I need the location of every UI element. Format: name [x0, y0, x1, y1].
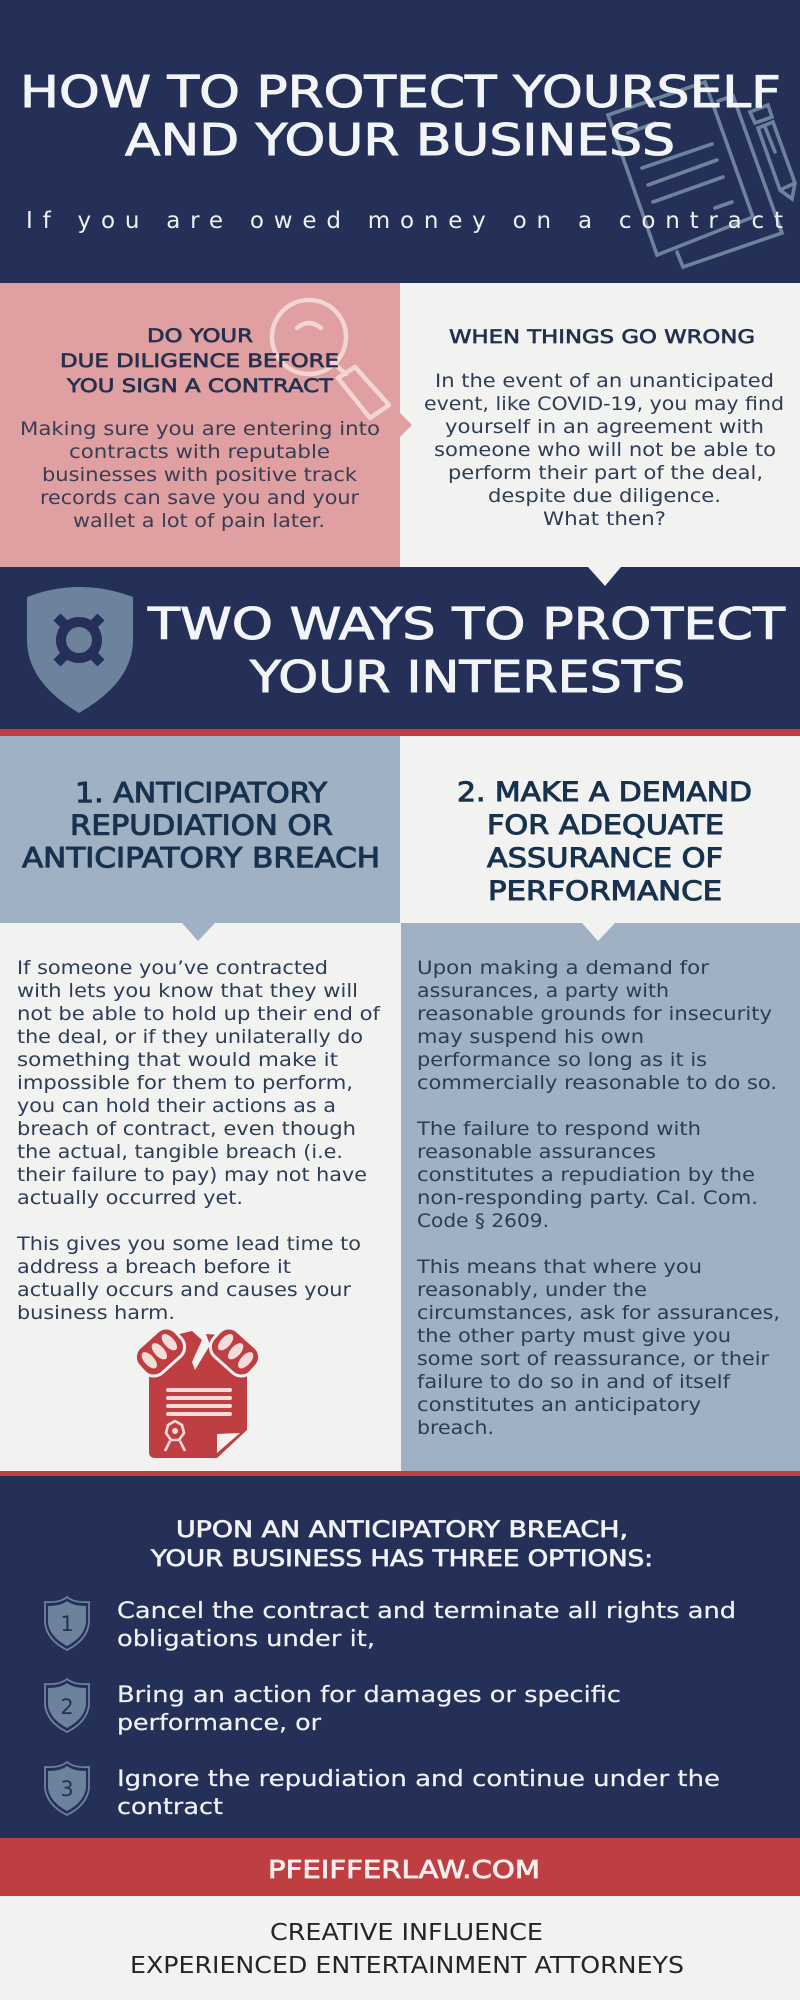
text: demand paragraph three: some sort of reassurance, or their	[417, 1348, 769, 1370]
text: anticipatory paragraph one: not be able to hold up their end of	[17, 1003, 381, 1025]
text: due diligence body: Making sure you are entering into	[20, 418, 380, 440]
heading: do your due diligence: DUE DILIGENCE BEFORE	[60, 350, 339, 372]
text: when things go wrong body: What then?	[543, 508, 666, 530]
panel: demand for adequate assurance	[400, 736, 800, 1471]
website banner	[0, 1838, 800, 1896]
text: due diligence body: records can save you and your	[40, 487, 359, 509]
arrow: off-white pointer	[582, 923, 615, 941]
title	[20, 67, 781, 166]
text: when things go wrong body: yourself in an agreement with	[445, 416, 764, 438]
text: anticipatory paragraph two: actually occurs and causes your	[17, 1279, 351, 1301]
text: anticipatory paragraph two: address a breach before it	[17, 1256, 291, 1278]
text: anticipatory paragraph one: If someone you’ve contracted	[17, 957, 328, 979]
text: demand paragraph three: breach.	[417, 1417, 494, 1439]
text: anticipatory paragraph two: This gives you some lead time to	[16, 1233, 361, 1255]
icon: torn contract with fists	[130, 1323, 265, 1458]
icon: shield number 2	[45, 1679, 89, 1732]
title: HOW TO PROTECT YOURSELF	[20, 67, 781, 118]
text: due diligence body: wallet a lot of pain later.	[73, 510, 325, 532]
text: anticipatory paragraph one	[17, 957, 381, 1209]
icon: magnifying glass	[272, 300, 389, 418]
text: due diligence body	[20, 418, 380, 532]
text: option 2: Bring an action for damages or specific	[117, 1683, 621, 1708]
heading: make a demand: 2. MAKE A DEMAND	[457, 777, 752, 808]
heading: anticipatory repudiation: ANTICIPATORY BREACH	[22, 842, 380, 874]
text: anticipatory paragraph one: actually occurred yet.	[17, 1187, 243, 1209]
heading: three options	[150, 1518, 653, 1572]
arrow: slate pointer	[182, 923, 215, 941]
heading: anticipatory repudiation: REPUDIATION OR	[70, 810, 333, 842]
title: AND YOUR BUSINESS	[125, 115, 675, 166]
text: due diligence body: businesses with positive track	[42, 464, 357, 486]
icon: contract and pencil	[608, 82, 795, 267]
footer tagline: CREATIVE INFLUENCE	[270, 1920, 543, 1946]
text: when things go wrong body: event, like COVID-19, you may find	[424, 393, 784, 415]
icon: shield number 3	[45, 1762, 89, 1815]
text: anticipatory paragraph one: impossible for them to perform,	[17, 1072, 353, 1094]
text: demand paragraph two: Code § 2609.	[417, 1210, 549, 1232]
text: anticipatory paragraph one: the deal, or if they unilaterally do	[17, 1026, 363, 1048]
text: anticipatory paragraph one: with lets you know that they will	[17, 980, 358, 1002]
text: when things go wrong body: perform their part of the deal,	[448, 462, 763, 484]
icon: shield number 3: 3	[60, 1777, 74, 1801]
text: option 2	[117, 1683, 621, 1736]
header panel	[0, 0, 800, 283]
text: demand paragraph three: This means that where you	[416, 1256, 702, 1278]
heading: anticipatory repudiation: 1. ANTICIPATORY	[75, 777, 327, 809]
text: anticipatory paragraph one: something that would make it	[17, 1049, 338, 1071]
text: anticipatory paragraph two	[16, 1233, 361, 1324]
heading: three options: UPON AN ANTICIPATORY BREACH,	[176, 1518, 628, 1543]
text: demand paragraph two: constitutes a repudiation by the	[417, 1164, 755, 1186]
heading: make a demand: FOR ADEQUATE	[487, 810, 724, 841]
panel: when things go wrong	[400, 283, 800, 567]
text: when things go wrong body	[424, 370, 784, 530]
footer tagline	[130, 1920, 684, 1979]
text: option 3: contract	[117, 1795, 223, 1820]
text: demand paragraph three: constitutes an anticipatory	[417, 1394, 701, 1416]
text: demand paragraph one	[417, 957, 777, 1094]
heading: two ways: YOUR INTERESTS	[249, 652, 685, 703]
panel: anticipatory repudiation	[0, 736, 400, 1471]
text: demand paragraph one: assurances, a party with	[417, 980, 669, 1002]
heading: when things go wrong: WHEN THINGS GO WRONG	[449, 326, 755, 348]
text: demand paragraph one: performance so long as it is	[417, 1049, 707, 1071]
heading: two ways: TWO WAYS TO PROTECT	[147, 599, 785, 650]
icon: shield number 1	[45, 1597, 89, 1650]
text: when things go wrong body: despite due diligence.	[488, 485, 721, 507]
icon: shield with vault symbol	[27, 587, 133, 713]
text: demand paragraph two: The failure to respond with	[416, 1118, 701, 1140]
text: anticipatory paragraph one: the actual, tangible breach (i.e.	[17, 1141, 343, 1163]
panel: due diligence	[0, 283, 400, 567]
text: anticipatory paragraph two: business harm.	[17, 1302, 175, 1324]
text: due diligence body: contracts with reputable	[69, 441, 330, 463]
banner: two ways to protect	[0, 567, 800, 736]
heading: anticipatory repudiation	[22, 777, 380, 874]
text: demand paragraph three: reasonably, under the	[417, 1279, 647, 1301]
text: demand paragraph three: the other party must give you	[417, 1325, 731, 1347]
arrow: pink pointer	[399, 412, 412, 438]
text: anticipatory paragraph one: their failure to pay) may not have	[17, 1164, 367, 1186]
text: when things go wrong body: In the event of an unanticipated	[435, 370, 774, 392]
heading: make a demand: PERFORMANCE	[488, 876, 722, 907]
text: option 1: Cancel the contract and terminate all rights and	[117, 1599, 736, 1624]
heading: two ways	[147, 599, 785, 703]
text: demand paragraph one: Upon making a demand for	[417, 957, 709, 979]
icon: shield number 1: 1	[60, 1612, 74, 1636]
text: option 3: Ignore the repudiation and continue under the	[117, 1767, 720, 1792]
icon: shield number 2: 2	[60, 1695, 74, 1719]
text: demand paragraph two: reasonable assurances	[417, 1141, 656, 1163]
heading: do your due diligence	[60, 325, 339, 397]
text: demand paragraph one: may suspend his own	[417, 1026, 644, 1048]
heading: three options: YOUR BUSINESS HAS THREE OPTIONS:	[150, 1547, 653, 1572]
text: demand paragraph one: reasonable grounds for insecurity	[417, 1003, 772, 1025]
text: demand paragraph three: circumstances, ask for assurances,	[417, 1302, 780, 1324]
text: demand paragraph two	[416, 1118, 758, 1232]
panel: three options	[0, 1471, 800, 1838]
text: option 2: performance, or	[117, 1711, 322, 1736]
heading: do your due diligence: YOU SIGN A CONTRACT	[66, 375, 333, 397]
text: demand paragraph two: non-responding party. Cal. Com.	[417, 1187, 758, 1209]
footer tagline: EXPERIENCED ENTERTAINMENT ATTORNEYS	[130, 1953, 684, 1979]
text: option 1	[117, 1599, 736, 1652]
text: demand paragraph three: failure to do so in and of itself	[417, 1371, 731, 1393]
text: demand paragraph three	[416, 1256, 780, 1439]
heading: do your due diligence: DO YOUR	[147, 325, 253, 347]
text: anticipatory paragraph one: breach of contract, even though	[17, 1118, 356, 1140]
text: when things go wrong body: someone who will not be able to	[434, 439, 776, 461]
text: demand paragraph one: commercially reasonable to do so.	[417, 1072, 777, 1094]
text: option 3	[117, 1767, 720, 1820]
website banner: PFEIFFERLAW.COM	[268, 1855, 540, 1884]
text: option 1: obligations under it,	[117, 1627, 375, 1652]
heading: make a demand: ASSURANCE OF	[487, 843, 723, 874]
heading: make a demand	[457, 777, 752, 907]
text: anticipatory paragraph one: you can hold their actions as a	[17, 1095, 336, 1117]
subtitle: If you are owed money on a contract	[26, 208, 783, 234]
arrow: white pointer	[588, 567, 621, 586]
